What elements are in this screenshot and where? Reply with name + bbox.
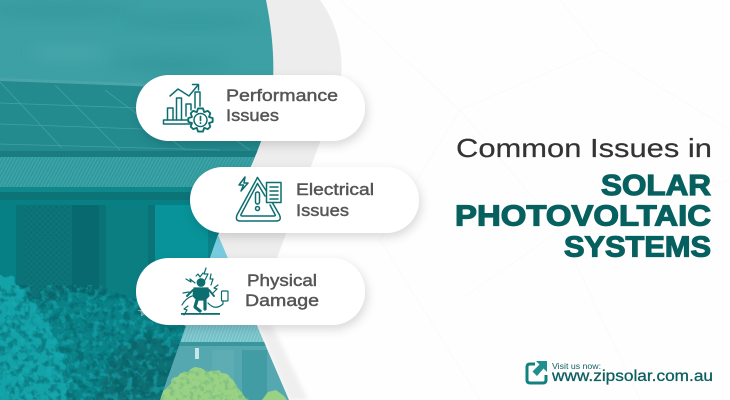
lighter roof (180, 325, 264, 342)
rack shadow (0, 151, 258, 157)
label: Performance (226, 86, 338, 105)
house wall (0, 200, 220, 310)
label: Issues (296, 201, 349, 220)
url text: www.zipsolar.com.au (551, 368, 713, 385)
icon: warning triangle with document (236, 177, 281, 221)
label: Issues (226, 106, 279, 125)
solar panels (0, 78, 290, 154)
title emphasis: solar photovoltaic systems: SOLAR (601, 170, 711, 202)
visit text: Visit us now: (552, 361, 601, 371)
label: Electrical (296, 180, 374, 199)
label (296, 180, 374, 220)
label: Physical (247, 271, 317, 290)
photo: lighter house wedge (160, 235, 289, 400)
trees (0, 272, 190, 400)
pill: electrical issues (190, 167, 419, 233)
label (245, 271, 319, 310)
title emphasis: solar photovoltaic systems: SYSTEMS (564, 232, 711, 264)
corrugated roof (0, 157, 255, 187)
icon: chart with gear (164, 84, 213, 132)
fascia (0, 187, 192, 200)
title emphasis: solar photovoltaic systems: PHOTOVOLTAIC (455, 200, 711, 232)
title emphasis: solar photovoltaic systems (455, 170, 711, 264)
photo: teal roof and house (0, 0, 290, 400)
pill: physical damage (136, 258, 365, 325)
icon: external link arrow (527, 361, 547, 383)
sky with clouds (0, 0, 274, 84)
label (226, 86, 338, 125)
pill: performance issues (136, 75, 365, 141)
title line: common issues: Common Issues in (456, 133, 712, 163)
label: Damage (245, 291, 319, 310)
website callout (527, 361, 713, 385)
grey curved band (218, 0, 342, 400)
green bush (155, 366, 287, 400)
lighter wall (160, 342, 289, 400)
title (455, 133, 712, 264)
icon: person with electric shock (181, 268, 228, 315)
